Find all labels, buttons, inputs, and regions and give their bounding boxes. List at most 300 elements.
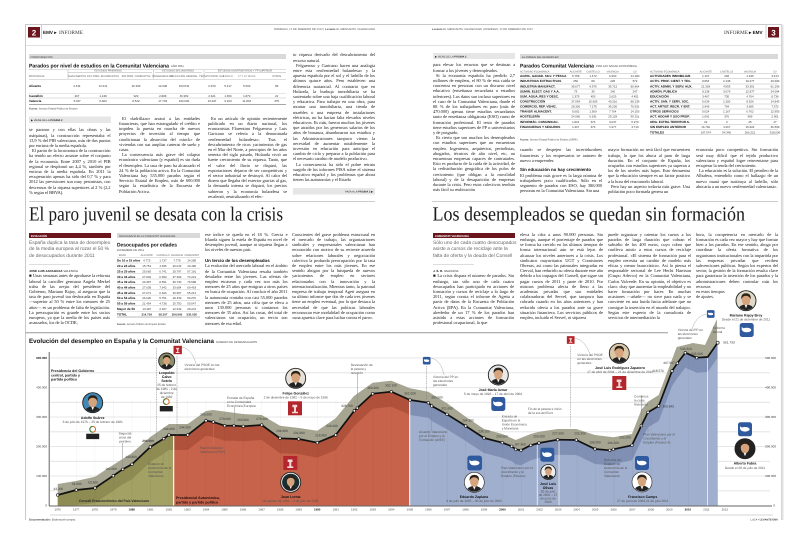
person: Mariano Rajoy: Mariano Rajoy Brey xyxy=(730,314,762,318)
annotations: Empleo (Pavace II) xyxy=(643,440,670,444)
annotations: Autonomía de la xyxy=(148,466,171,470)
table: parados por nivel de estudios: 46.952 xyxy=(180,94,189,98)
table: parados por actividad economica: CONSTRUCCIÓN xyxy=(520,99,546,103)
table: parados por nivel de estudios: 12.008 xyxy=(158,84,168,88)
table: desocupados por edades: 28.499 xyxy=(173,296,182,300)
table: parados por actividad economica: 3.719 xyxy=(631,125,639,129)
table: parados por actividad economica: ACT. ARTIST. RECR. Y ENT. xyxy=(650,104,690,108)
table: parados por actividad economica: CASTELLÓ xyxy=(720,69,733,73)
person: Leopoldo Calvo Sotelo: Calvo xyxy=(162,375,171,379)
table: parados por nivel de estudios: 190.696 xyxy=(179,99,190,103)
person: José Luis Rodríguez Zapatero: José Luis Rodríguez Zapatero xyxy=(595,366,645,370)
table: parados por actividad economica: 33.351 xyxy=(746,84,755,88)
table: parados por actividad economica: VALENCIA xyxy=(744,70,756,73)
year labels: 2004 xyxy=(573,508,580,512)
icon: PP small 1996 xyxy=(423,357,431,365)
annotations: por el Empleo y la xyxy=(419,434,445,438)
table: parados por actividad economica: 1.864 xyxy=(572,120,580,124)
table: parados por actividad economica: AGRIC, GANAD. SILV. Y PESCA xyxy=(520,74,567,78)
band: evolucion xyxy=(29,233,111,238)
table: desocupados por edades: Desocupados por edades xyxy=(117,242,177,248)
person: José Luis Olivas: Olivas xyxy=(543,486,553,490)
top right column 3 text: Pero hay un aspecto todavía más grave. Una población poco formada genera un xyxy=(608,184,690,194)
annotations: Comienza xyxy=(634,395,649,399)
table: parados por nivel de estudios: Valencia xyxy=(29,99,42,103)
table: parados por actividad economica: ORG. EXTRA-TERRITOR.S. xyxy=(650,120,690,124)
table: desocupados por edades: 214.724 xyxy=(141,312,152,316)
table: parados por actividad economica: 40.216 xyxy=(608,99,618,103)
value labels: 54.000 xyxy=(72,482,82,486)
table: parados por actividad economica: 4.267 xyxy=(723,125,731,129)
table: desocupados por edades: 35 a 39 años xyxy=(117,280,136,284)
year labels: 1995 xyxy=(407,508,414,512)
table: parados por actividad economica: 3.444 xyxy=(771,74,779,78)
top left column 4 text: Felgueroso y Garicano hacen una analogía entre esta «enfermedad holandesa» y la apuesta española por el sol y el ladrillo de los últimos quince años. Pero establecen una diferencia sustancial. Al contrario que en Holanda, la burbuja inmobiliaria se ha sustentado sobre una baja cualificación laboral y educativa. Para trabajar en una obra, para montar una inmobiliaria, una tienda de muebles o una empresa de instalaciones eléctricas, no ha hacían falta elevados niveles educativos. Es más, fueron muchos los jóvenes que atraídos por los generosos salarios de los años de bonanza, abandonaron sus estudios y las Administraciones tampoco vieron la necesidad de aumentar notablemente la inversión en educación para anticipar el cambio de ciclo y preparar a la población para el necesario cambio de modelo productivo. xyxy=(293,63,375,161)
table: desocupados por edades: 535.036 xyxy=(186,312,197,316)
year labels: 1990 xyxy=(314,508,321,512)
person: Joan Lerma: Joan Lerma xyxy=(281,495,301,499)
annotations: generales xyxy=(678,336,692,340)
table: desocupados por edades: 264.945 xyxy=(172,312,183,316)
table: desocupados por edades: 25.665 xyxy=(142,269,152,273)
annotations: Comunitat xyxy=(148,470,163,474)
annotations: Estatuto de xyxy=(148,462,164,466)
annotations: financiera xyxy=(634,403,648,407)
mid left column 3 text: ese índice se queda en el 18 %. Grecia e Irlanda siguen la estela de España en nivel de desempleo juvenil, aunque ni siquiera llegan a los niveles de nuestro país. xyxy=(205,232,288,252)
annotations: Plan Valenciano por el xyxy=(501,466,533,470)
table: parados por actividad economica: 35.220 xyxy=(608,104,618,108)
page header right: ▸ EMV xyxy=(748,30,763,35)
table: parados por actividad economica: 70.931 xyxy=(631,104,640,108)
table: parados por actividad economica: 19 xyxy=(704,120,708,124)
table: desocupados por edades: 50.547 xyxy=(187,302,197,306)
table: parados por actividad economica: Parados Comunitat Valenciana xyxy=(520,63,594,69)
table: parados por nivel de estudios: 2.º Y 3.º CICLO xyxy=(238,75,255,78)
year labels: 2008 xyxy=(648,508,654,512)
year labels: 2006 xyxy=(610,508,617,512)
table: parados por actividad economica: ACT. HOGAR Y USO PROP. xyxy=(650,115,690,119)
year labels: 1998 xyxy=(462,508,469,512)
band: evolucion: EVOLUCIÓN xyxy=(31,234,47,238)
value labels: 200.000 xyxy=(142,439,154,443)
table: desocupados por edades: 13.115 xyxy=(142,307,151,311)
value labels: 263.900 xyxy=(237,418,249,422)
table: parados por actividad economica: 55.311 xyxy=(631,115,640,119)
person: José María Aznar: José María Aznar xyxy=(479,388,508,392)
person: Leopoldo Calvo Sotelo: Leopoldo xyxy=(159,371,175,375)
top left column 2 text xyxy=(119,116,200,194)
table: parados por actividad economica: VALENCIA xyxy=(607,70,619,73)
table: parados por actividad economica: 24.094 xyxy=(771,89,780,93)
table: parados por actividad economica: 1.167 xyxy=(723,110,731,114)
mid left column 3 text: Un tercio de los desempleados xyxy=(205,258,270,263)
table: parados por actividad economica: TOTALES xyxy=(650,130,664,134)
table: desocupados por edades: 7.775 xyxy=(173,259,181,263)
table: desocupados por edades: 69.463 xyxy=(187,286,197,290)
table: desocupados por edades: 26.620 xyxy=(142,296,152,300)
table: desocupados por edades: 2.187 xyxy=(159,307,167,311)
table: parados por nivel de estudios: ANALFABETOS xyxy=(68,75,86,78)
top left column 1 text: se pararon y con ellas las obras y las máquinas), la construcción representaba el 13,9 % del PIB valenciano, más de dos puntos por encima de la media española. xyxy=(29,127,110,148)
person: Felipe González xyxy=(264,368,328,415)
year labels: 1991 xyxy=(332,508,339,512)
axis labels right: 300.000 xyxy=(765,415,776,419)
axis labels left: 300.000 xyxy=(36,415,47,419)
value labels: 203.200 xyxy=(619,435,631,439)
table: parados por actividad economica: 6.990 xyxy=(609,74,617,78)
table: parados por nivel de estudios: 9.103 xyxy=(224,99,232,103)
year labels: 2001 xyxy=(518,508,525,512)
top right column 1 text: para elevar los recursos que se destinan a formar a los jóvenes y desempleados. xyxy=(433,62,515,73)
annotations: Plan Económico xyxy=(200,446,223,450)
band: pasa a la pagina: PASA A LA PÁGINA 3 ▶ xyxy=(345,190,373,194)
table: parados por actividad economica: 1.167 xyxy=(702,74,710,78)
table: parados por actividad economica: 12.953 xyxy=(771,110,780,114)
table: parados por actividad economica: 4.451 xyxy=(631,94,639,98)
annotations: Crecimiento y el xyxy=(643,436,666,440)
table: desocupados por edades: ALICANTE xyxy=(141,254,153,257)
mid left column 4 text: Conscientes del grave problema estructural en el mercado de trabajo, las organizaciones sindicales y empresariales valencianas han reconocido con motivo de su reciente acuerdo sobre relaciones laborales y negociación colectiva la profunda preocupación por la tasa de empleo entre los más jóvenes. En ese sentido abogan por la búsqueda de nuevos yacimientos de empleo en sectores relacionados con la innovación y la internacionalización. Mientras tanto, la patronal empresa de trabajo temporal Agett asegura en su último informe que dos de cada tres jóvenes tiene un empleo eventual, por lo que destaca la necesidad de que las políticas laborales reconozcan este modalidad de ocupación como «una apuesta clave para luchar contra el paro». xyxy=(292,232,375,320)
value labels: 264.300 xyxy=(462,418,474,422)
year labels: 2009 xyxy=(666,508,673,512)
person: Alberto Fabra: Alberto Fabra xyxy=(734,462,756,466)
annotations: Autonomía de la xyxy=(604,466,627,470)
value labels: 140.800 xyxy=(125,455,137,459)
table: desocupados por edades: 38.730 xyxy=(173,280,182,284)
value labels: 362.600 xyxy=(404,392,416,396)
table: parados por actividad economica: 21.303 xyxy=(701,84,711,88)
value labels: 360.845 xyxy=(663,405,674,409)
table: parados por nivel de estudios: 5.509 xyxy=(243,84,251,88)
table: parados por actividad economica: 54.340 xyxy=(722,130,732,134)
table: parados por actividad economica: 5.758 xyxy=(572,74,580,78)
table: parados por nivel de estudios xyxy=(29,54,286,110)
table: parados por actividad economica: 228 xyxy=(610,79,616,83)
top left column 2 text: La consecuencia más grave del colapso económico valenciano (y español) es sin duda el desempleo. La tasa de paro ha alcanzado el 24 % de la población activa. En la Comunitat Valenciana hay 535.000 parados según el Servicio Estatal de Empleo, más de 600.000 según la estadística de la Encuesta de Población Activa. xyxy=(119,152,200,194)
year labels: 1992 xyxy=(351,508,358,512)
year labels: 1978 xyxy=(92,508,98,512)
table: parados por nivel de estudios: EST.PRIM. COMPLETOS xyxy=(122,75,151,78)
table: parados por nivel de estudios: 8.542 xyxy=(132,99,140,103)
annotations: Acuerdo Valenciano xyxy=(419,430,448,434)
year labels: 1987 xyxy=(258,508,265,512)
table: parados por actividad economica: 35 xyxy=(591,89,595,93)
annotations: Victoria del PP en xyxy=(433,375,458,379)
page header right: Levante EL MERCANTIL VALENCIANO | DOMINGO, 12 DE FEBRERO DE 2012 xyxy=(432,28,534,31)
table: desocupados por edades: 27.671 xyxy=(142,291,152,295)
label: presidencia autonomica: Presidencial Autonómica, xyxy=(176,496,220,500)
table: parados por actividad economica: 29.689 xyxy=(771,79,780,83)
axis labels right: 200.000 xyxy=(765,444,776,448)
table: desocupados por edades: 33.684 xyxy=(173,286,182,290)
value labels: 418.576 xyxy=(652,369,664,373)
table: parados por actividad economica: 247 xyxy=(633,89,638,93)
annotations: Victoria del PSOE en las xyxy=(184,363,220,367)
table: parados por actividad economica: 376 xyxy=(724,115,730,119)
chart title: Evolución del desempleo en España y la Comunitat Valenciana xyxy=(29,338,214,345)
annotations: la peseta y xyxy=(351,367,367,371)
label: presidencia del gobierno central: Presidencia del Gobierno xyxy=(51,369,95,373)
table: parados por actividad economica: TRANSP. ALMACENT. xyxy=(520,110,552,114)
year labels: 1980 xyxy=(129,508,135,512)
table: parados por nivel de estudios: 1.650 xyxy=(224,94,232,98)
table: parados por nivel de estudios: 11.803 xyxy=(242,99,251,103)
person: José Luis Olivas: 30 de julio xyxy=(541,490,555,494)
table: parados por actividad economica: OTROS SERVICIOS xyxy=(650,110,679,114)
table: parados por actividad economica: COMERCIO, REP. VEHIC. xyxy=(520,104,557,108)
table: parados por actividad economica: 14.180 xyxy=(631,74,640,78)
axis labels right: 400.000 xyxy=(765,386,776,390)
label: consell preautonomico: Consell Preautonómico del País Valenciano xyxy=(79,499,149,503)
person: Leopoldo Calvo Sotelo: de 1981 - 2 de xyxy=(156,387,177,391)
table: parados por actividad economica: POR ACTIVIDAD ECONÓMICA xyxy=(596,64,637,68)
band: comunitat valenciana: COMUNITAT VALENCIANA xyxy=(435,235,469,238)
table: parados por actividad economica: 73 xyxy=(574,89,578,93)
annotations xyxy=(119,326,725,478)
year labels: 1999 xyxy=(481,508,488,512)
person: Felipe González: 2 de diciembre de 1982 – 5 de mayo de 1996 xyxy=(264,396,328,400)
annotations: Segunda xyxy=(119,431,132,435)
person: José María Aznar: 5 de mayo de 1996 – 17 de abril de 2004 xyxy=(464,392,522,396)
year labels: 2012 xyxy=(722,508,729,512)
band: pasa a la pagina xyxy=(293,188,375,194)
table: parados por actividad economica: 16.760 xyxy=(701,125,711,129)
table: desocupados por edades: 27.638 xyxy=(142,286,152,290)
value labels: 209.000 xyxy=(533,435,545,439)
annotations: Victoria del PSOE xyxy=(577,353,603,357)
table: parados por nivel de estudios: 58 xyxy=(275,84,279,88)
table: desocupados por edades: 29.387 xyxy=(142,280,152,284)
year labels: 1994 xyxy=(388,508,395,512)
table: parados por actividad economica: SIN EMPLEO ANTERIOR xyxy=(650,125,687,129)
annotations: Valenciano (PEV) xyxy=(200,450,225,454)
annotations: Estatuto de xyxy=(604,462,620,466)
person: Leopoldo Calvo Sotelo: Sotelo xyxy=(161,379,172,383)
value labels: 218.800 xyxy=(315,434,327,438)
annotations: Comunitat xyxy=(604,470,619,474)
annotations: Fin de la peseta e inicio xyxy=(528,407,562,411)
page header right: INFORME xyxy=(724,30,748,36)
headline right: Los desempleados se quedan sin formación xyxy=(432,204,745,226)
value labels: 321.600 xyxy=(441,406,453,410)
table: desocupados por edades: 7.942 xyxy=(159,286,167,290)
table: desocupados por edades: 45 a 49 años xyxy=(117,291,136,295)
person: Leopoldo Calvo Sotelo: de 1982 xyxy=(161,395,173,399)
annotations: petróleo xyxy=(119,439,131,443)
annotations: Plan Valenciano por el xyxy=(643,432,675,436)
annotations: Valenciana xyxy=(604,474,620,478)
table: parados por nivel de estudios: 17.703 xyxy=(158,99,168,103)
table: parados por actividad economica: SUM. AGUA, RES Y DESC. xyxy=(520,94,559,98)
table: parados por nivel de estudios: 2.621 xyxy=(208,94,216,98)
annotations: Reforma xyxy=(713,326,725,330)
value labels: 545.823 xyxy=(680,347,692,351)
table: desocupados por edades: 40.486 xyxy=(187,264,197,268)
person: Adolfo Suárez: 3 de julio de 1976 – 25 de febrero de 1981 xyxy=(63,420,123,424)
table: parados por actividad economica: 6.762 xyxy=(746,110,754,114)
value labels: 497.847 xyxy=(663,361,675,365)
table: parados por actividad economica: 7.175 xyxy=(589,104,597,108)
mid right column 4 text: de ajustes. xyxy=(696,294,714,299)
area chart: desempleados 1976-2012 xyxy=(49,319,773,515)
year labels: 1993 xyxy=(370,508,376,512)
table: desocupados por edades: 74.221 xyxy=(187,275,197,279)
table: parados por actividad economica: 8.526 xyxy=(746,99,754,103)
value labels: 246.600 xyxy=(326,424,338,428)
value labels: 198.200 xyxy=(589,441,601,445)
table: parados por nivel de estudios: OTROS xyxy=(272,75,281,78)
value labels: 535.505 xyxy=(691,352,703,356)
axis labels right: 100.000 xyxy=(765,474,776,478)
mid right column 3 text: puede organizar y orientar los cursos a los parados de larga duración que cobran el subsidio de los 400 euros, cuyo cobro que conlleva asistir a estos cursos de reciclaje profesional. «El sistema de formación para el empleo necesita un cambio de modelo más eficaz y menor burocrático». Así lo piensa el responsable sectorial de Lee Hecht Harrison (Grupo Adecco) en la Comunitat Valenciana, Carlos Valverde. En su opinión, el objetivo es claro: «hay que aumentar la empleabilidad y no hacer formación por hacer. En muchas ocasiones —añade— no sirve para nada y se convierte en una huida hacia adelante que no consigue la inserción en el mundo del trabajo». Según este experto de la consultoría de servicios de intermediación la xyxy=(608,232,691,320)
top right column 4 text: La educación es la solución. El petróleo de la Albufera, entendido como el hallazgo de un nuevo maná que sustituya al ladrillo, sólo abocaría a un nuevo «enfermedad valenciana». xyxy=(696,168,778,189)
year labels xyxy=(54,508,729,512)
mid right column 2 text: eleva la cifra a unos 90.000 personas. Sin embargo, aunque el porcentaje de parados que se forma ha crecido en los últimos tiempos de forma internacional aún se está lejos de alcanzar los niveles anteriores a la crisis. Los sindicatos mayoritarios UGT y Comisiones Obreras, así como las patronales integradas en Cierval, han reducido su oferta durante este año debido a los impagos del Consell, que sigue sin pagar cursos de 2011 y parte de 2010. Por mismos problema afecta de lleno a las academias privadas que son entidades colaboradoras del Servef, que tampoco han cobrado cuando en los años anteriores y han reducido oferta a los parados ante su grave situación financiera. Los servicios públicos de empleo, incluido el Servef, ni siquiera xyxy=(520,232,603,320)
table: parados por nivel de estudios: 14.641 xyxy=(99,84,108,88)
table: parados por actividad economica: 8.854 xyxy=(702,79,710,83)
table: desocupados por edades: CASTELLÓ xyxy=(156,253,170,257)
table: parados por actividad economica: 37.054 xyxy=(571,99,581,103)
person: José Luis Olivas: de 2002 – 27 xyxy=(539,493,558,497)
table: parados por actividad economica: 2.138 xyxy=(723,79,731,83)
table: parados por actividad economica: CV xyxy=(633,70,637,73)
table: parados por actividad economica: 7.372 xyxy=(771,104,779,108)
annotations: Entrada de xyxy=(502,415,518,419)
year labels: 2005 xyxy=(592,508,599,512)
annotations: las elecciones xyxy=(678,332,698,336)
table: parados por nivel de estudios: 150.542 xyxy=(179,84,190,88)
year labels: 1982 xyxy=(166,508,173,512)
deck left: España duplica la tasa de desempleo xyxy=(29,241,110,246)
person: Adolfo Suárez xyxy=(63,393,123,439)
table: parados por actividad economica: 6.631 xyxy=(589,115,597,119)
axis labels left: 400.000 xyxy=(36,386,47,390)
deck left: de la media europea al rozar el 50 % xyxy=(29,247,109,252)
table: desocupados por edades xyxy=(117,233,200,326)
table: desocupados por edades: 5.751 xyxy=(159,296,167,300)
deck right: asiste a cursos de reciclaje ante la xyxy=(433,247,508,252)
table: parados por actividad economica: EL ORIGEN DEL DESEMPLEO xyxy=(522,56,559,59)
annotations: en las elecciones xyxy=(577,357,602,361)
year labels: 2011 xyxy=(703,508,710,512)
table: parados por actividad economica: 88.135 xyxy=(631,99,640,103)
person: Felipe González: Felipe González xyxy=(282,391,309,395)
table: desocupados por edades: 40 a 44 años xyxy=(117,286,136,290)
table: desocupados por edades: 21.454 xyxy=(142,302,152,306)
table: desocupados por edades: 14.285 xyxy=(187,259,197,263)
table: parados por actividad economica: SUMIN. ELECT. GAS Y A.A. xyxy=(520,89,560,93)
table: parados por actividad economica: 2.623 xyxy=(609,94,617,98)
table: desocupados por edades: COMUNITAT xyxy=(184,254,199,257)
table: parados por actividad economica: 88 xyxy=(591,79,595,83)
table: parados por nivel de estudios: PROVINCIAS xyxy=(29,75,45,78)
top right column 2 text: El problema más grave es la larga nómina de trabajadores poco cualificados. Sólo en el segmento de parados con ESO, hay 388.000 personas en la Comunitat Valenciana. Sin una xyxy=(520,173,602,193)
top right column 3 text: mayor formación no será fácil que encuentren trabajo, lo que los aboca al paro de larga duración. En el conjunto de España, los ocupados con estudios superiores ya superan a los de los niveles más bajos. Esto demuestra que la educación siempre es un factor positivo a la hora del reacomodo laboral. xyxy=(608,147,690,184)
table: parados por actividad economica: 3.467 xyxy=(702,94,710,98)
table: parados por actividad economica: Fuente: Servicio Estatal Público de Empleo (SEPE) xyxy=(520,138,578,142)
table: desocupados por edades: 6.626 xyxy=(159,291,167,295)
table: parados por actividad economica: 1.635 xyxy=(746,74,754,78)
label: presidencia del gobierno central: partido político xyxy=(51,378,78,382)
table: desocupados por edades: 12.942 xyxy=(173,307,182,311)
mid right column 4 text: en estos tiempos xyxy=(696,289,725,294)
annotations: Económica Europea xyxy=(227,404,256,408)
byline right: J. S. R. VALENCIA xyxy=(433,269,458,273)
top left column 1 text xyxy=(29,127,111,195)
top left column 3 text: En un artículo de opinión recientemente publicado en un diario nacional, los economistas Florentino Felgueroso y Luis Garicano se refería a la denominada «enfermedad holandesa». Tras el descubrimiento de ricos yacimientos de gas en el Mar del Norte, a principios de los años sesenta del siglo pasado, Holanda vivió un fuerte crecimiento de su riqueza. Tanto, que el valor del florín se disparó, las exportaciones dejaron de ser competitivas y el sector industrial se destruyó. Al calor del dinero que llegaba del exterior gracias al gas, la demanda interna se disparó, los precios subieron y la economía holandesa se recalentó, neutralizando el efec- xyxy=(208,116,287,199)
value labels: 270.000 xyxy=(219,417,231,421)
person: Leopoldo Calvo Sotelo xyxy=(156,353,177,411)
table: parados por actividad economica: 5.024 xyxy=(702,110,710,114)
table: parados por actividad economica: CASTELLÓ xyxy=(586,69,600,73)
table: parados por actividad economica: INDUSTRIAS EXTRACTIVAS xyxy=(520,79,561,83)
table: parados por actividad economica: 376 xyxy=(591,120,596,124)
table: desocupados por edades: 4.738 xyxy=(159,302,167,306)
table: parados por actividad economica: 518.036 xyxy=(770,130,781,134)
table: parados por nivel de estudios: 6.879 xyxy=(208,84,216,88)
table: desocupados por edades: 15.751 xyxy=(142,264,152,268)
year labels: 1989 xyxy=(295,508,302,512)
table: parados por actividad economica: 1.309 xyxy=(589,110,597,114)
byline left xyxy=(29,264,78,273)
person: Joan Lerma: de agosto de 1982 – 3 de julio de 1995 xyxy=(263,499,318,503)
value labels: 227.600 xyxy=(552,432,564,436)
axis labels right xyxy=(765,356,776,508)
table: desocupados por edades: DICIEMBRE DE 2011 xyxy=(117,248,144,252)
band: comunitat valenciana xyxy=(433,233,515,238)
table: parados por actividad economica: 140 xyxy=(610,89,616,93)
table: desocupados por edades: EDAD xyxy=(119,254,126,257)
table: parados por actividad economica: 25 xyxy=(748,120,752,124)
table: desocupados por edades: 30 a 34 años xyxy=(117,275,136,279)
annotations: Unión Económica xyxy=(502,423,527,427)
table: parados por nivel de estudios: Fuente: Servicio Estatal Público de Empleo xyxy=(29,108,78,110)
table: desocupados por edades: 57.191 xyxy=(187,269,197,273)
value labels: 389.900 xyxy=(367,386,379,390)
table: parados por actividad economica: 7.764 xyxy=(609,110,617,114)
annotations: Crecimiento y el xyxy=(501,470,524,474)
top right column 1 text: Si la economía española ha perdido 2,7 millones de empleos, el 80 % de esta caída se concentra en personas con un discurso nivel educativo (enseñanza secundaria o estudios inferiores). Los datos son incluso superiores en el caso de la Comunitat Valenciana, donde el 88 % de los trabajadores en paro (más de 470.000) apenas tiene estudios secundarios tanto de enseñanza obligatoria (ESO) como de formación profesional. El resto de parados tiene estudios superiores de FP o universitarios y de posgrado. xyxy=(433,73,515,135)
table: parados por nivel de estudios: 929 xyxy=(134,94,139,98)
person: José Luis Rodríguez Zapatero: 17 de abril de 2004 – 21 de diciembre de 2011 xyxy=(587,370,653,374)
table: desocupados por edades: RADIOGRAFÍA EN LA COMUNITAT VALENCIANA xyxy=(119,234,176,238)
annotations: generales xyxy=(577,361,592,365)
table: parados por actividad economica: 35.677 xyxy=(571,84,581,88)
table: parados por actividad economica: 1.280 xyxy=(723,99,731,103)
person: Joan Lerma xyxy=(263,456,318,503)
person: Francisco Camps: 27 de junio de 2003-21 de julio 2011 xyxy=(617,499,669,503)
icon: PP small 2011 xyxy=(707,310,715,318)
table: parados por actividad economica: ACTIV. SAN. Y SERV. SOC. xyxy=(650,99,689,103)
top right column 4 text: economía poco competitiva. Sin formación será muy difícil que el tejido productivo valenciano y español logre reinventarse para recuperar la senda del crecimiento. xyxy=(696,147,778,168)
table: parados por actividad economica: 15.822 xyxy=(746,125,755,129)
table: parados por actividad economica: 61.199 xyxy=(771,84,780,88)
table: parados por nivel de estudios: 5.683 xyxy=(99,99,107,103)
page header right: 3 xyxy=(771,28,776,38)
table: parados por nivel de estudios: 2.431 xyxy=(73,84,81,88)
year labels: 2003 xyxy=(555,508,562,512)
table: parados por actividad economica: EDUCACIÓN xyxy=(650,94,670,98)
table: parados por actividad economica: ACTIVIDAD ECONÓMICA xyxy=(520,69,550,73)
year labels: 1976 xyxy=(54,508,61,512)
label: presidencia del gobierno central: central, partido y xyxy=(51,373,80,377)
value labels: 203.500 xyxy=(496,435,508,439)
year labels: 1981 xyxy=(147,508,154,512)
table: parados por actividad economica: 28.326 xyxy=(571,104,581,108)
annotations: generales xyxy=(433,383,447,387)
table: parados por actividad economica: 735 xyxy=(724,94,730,98)
table: desocupados por edades: 27.832 xyxy=(142,275,152,279)
